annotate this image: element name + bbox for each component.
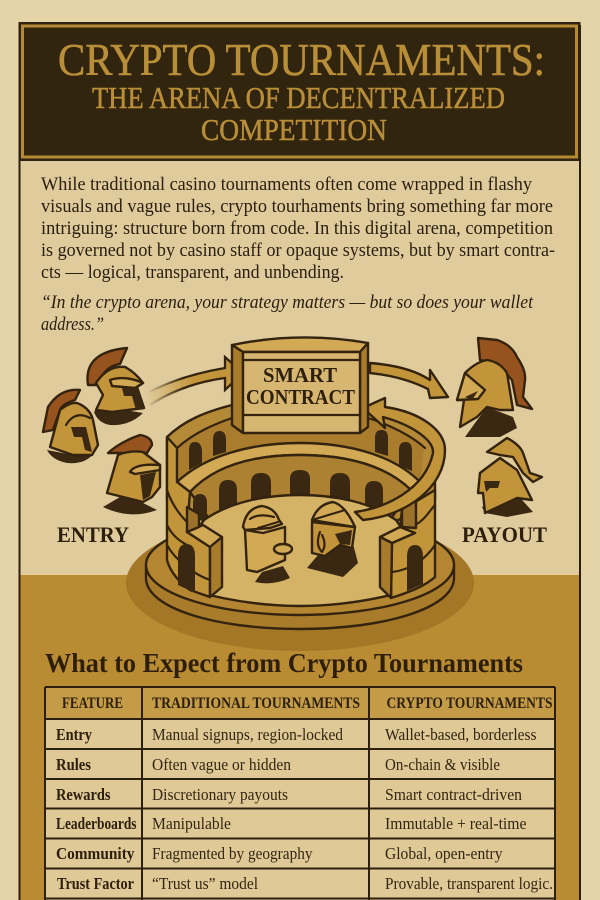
upper tier arches	[189, 430, 412, 471]
row: leaderboards: Immutable + real-time	[385, 814, 526, 833]
icon: payout arrow	[370, 363, 448, 398]
lower tier wall	[190, 455, 411, 520]
back wall	[167, 405, 435, 530]
panel: cream body	[20, 160, 580, 900]
intro paragraph: intriguing: structure born from code. In this digital arena, competition	[41, 218, 553, 239]
row: entry: Wallet-based, borderless	[385, 725, 536, 744]
row: rules: Rules	[56, 755, 91, 774]
row: community	[56, 844, 503, 863]
intro paragraph: While traditional casino tournaments often come wrapped in flashy	[41, 174, 532, 195]
row: leaderboards: Manipulable	[152, 814, 231, 833]
icon: payout helmet top	[457, 338, 532, 437]
row: rewards: Smart contract-driven	[385, 785, 522, 804]
table header row: CRYPTO TOURNAMENTS	[386, 695, 553, 712]
title banner: THE ARENA OF DECENTRALIZED	[92, 80, 505, 115]
row: trust factor: Provable, transparent logic.	[385, 874, 553, 893]
title banner: CRYPTO TOURNAMENTS:	[58, 34, 545, 85]
row: community: Fragmented by geography	[152, 844, 313, 863]
panel: gold ground band	[20, 575, 580, 900]
illustration: arena	[126, 398, 474, 651]
mid ledge ring	[177, 443, 421, 492]
pull quote	[41, 292, 534, 335]
intro paragraph: cts — logical, transparent, and unbending.	[41, 262, 344, 283]
outer wall right with gate	[380, 490, 435, 598]
outer wall left with gate	[167, 437, 222, 597]
row: entry: Manual signups, region-locked	[152, 725, 343, 744]
floor figure: right player	[307, 502, 358, 577]
row: entry	[56, 725, 536, 744]
icon: entry helmet lower	[103, 435, 160, 514]
row: community: Community	[56, 844, 135, 863]
intro paragraph: visuals and vague rules, crypto tourhaments bring something far more	[41, 196, 553, 217]
table header row: TRADITIONAL TOURNAMENTS	[152, 695, 360, 712]
arena shadow	[126, 515, 474, 651]
row: rewards	[56, 785, 522, 804]
row: rules	[56, 755, 500, 774]
icon: entry helmet left	[43, 390, 98, 463]
title banner	[18, 22, 580, 161]
smart contract block	[232, 337, 368, 433]
row: rewards: Rewards	[56, 785, 111, 804]
comparison table	[45, 687, 555, 900]
pull quote: “In the crypto arena, your strategy matters — but so does your wallet	[41, 292, 534, 313]
row: trust factor	[57, 874, 553, 893]
smart contract block: CONTRACT	[246, 385, 355, 409]
icon: entry arrow	[147, 357, 243, 405]
arena base disc	[146, 515, 454, 629]
row: trust factor: “Trust us” model	[152, 874, 258, 893]
label: entry: ENTRY	[57, 522, 129, 547]
label: payout: PAYOUT	[462, 522, 547, 547]
intro paragraph	[41, 174, 555, 283]
row: leaderboards	[56, 814, 526, 833]
row: entry: Entry	[56, 725, 92, 744]
icon: payout helmet lower	[478, 438, 542, 517]
smart contract block: SMART	[263, 363, 337, 387]
row: rules: Often vague or hidden	[152, 755, 291, 774]
icon: entry helmet top	[87, 348, 144, 425]
table header row: FEATURE	[62, 695, 123, 712]
table header row	[62, 695, 553, 712]
row: community: Global, open-entry	[385, 844, 503, 863]
lower tier arches	[193, 470, 383, 520]
pull quote: address.”	[41, 314, 104, 335]
floor figure: left player	[243, 506, 292, 583]
arena floor	[190, 495, 410, 606]
intro paragraph: is governed not by casino staff or opaque systems, but by smart contra-	[41, 240, 555, 261]
row: rules: On-chain & visible	[385, 755, 500, 774]
table cells	[45, 687, 555, 900]
heading: what to expect: What to Expect from Crypto Tournaments	[45, 648, 523, 678]
title banner: COMPETITION	[201, 112, 387, 147]
row: rewards: Discretionary payouts	[152, 785, 288, 804]
curved return arrow	[355, 398, 445, 520]
row: leaderboards: Leaderboards	[56, 814, 137, 833]
row: trust factor: Trust Factor	[57, 874, 134, 893]
